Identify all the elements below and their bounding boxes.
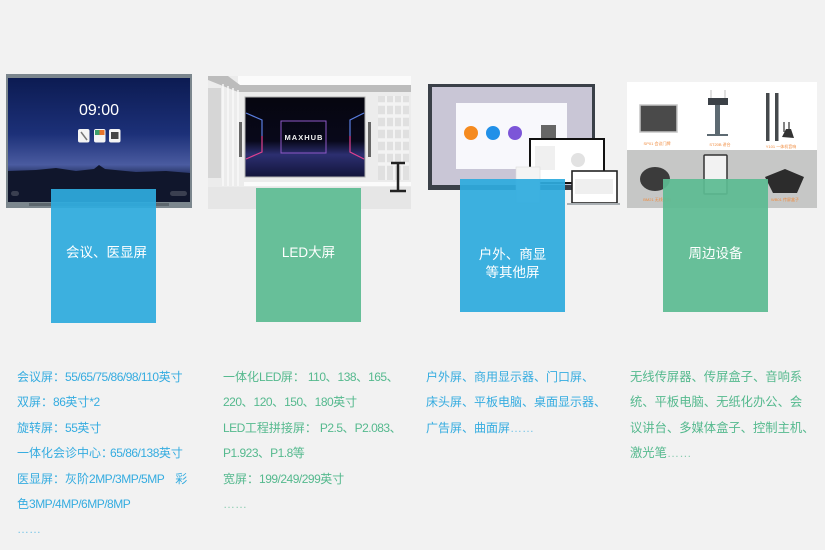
text: meeting display specs: ……: [17, 522, 41, 536]
text: meeting display specs: 医显屏：灰阶2MP/3MP/5MP 彩: [17, 472, 187, 486]
text: LED screen specs: ……: [223, 497, 247, 511]
image: peripheral devices: BM21 无线全向: [643, 196, 671, 202]
image: meeting screen: 09:00: [79, 102, 119, 119]
text: meeting display specs: 旋转屏：55英寸: [17, 421, 101, 435]
text: peripheral device list: 统、平板电脑、无纸化办公、会: [630, 395, 802, 409]
text: LED screen specs: 一体化LED屏：110、138、165、: [223, 370, 399, 384]
image: outdoor and commercial displays: [428, 84, 620, 205]
text: meeting display specs: [17, 370, 187, 536]
text: outdoor display list: 广告屏、曲面屏……: [426, 421, 534, 435]
text: LED screen specs: LED工程拼接屏：P2.5、P2.083、: [223, 421, 402, 435]
text: LED screen specs: [223, 370, 402, 511]
text: peripheral device list: [630, 370, 814, 460]
panel: outdoor and commercial displays: [460, 179, 565, 312]
image: LED screen room: MAXHUB: [285, 133, 323, 142]
image: LED screen room: [208, 76, 411, 209]
text: LED screen specs: P1.923、P1.8等: [223, 446, 305, 460]
text: outdoor display list: 床头屏、平板电脑、桌面显示器、: [426, 395, 606, 409]
text: meeting display specs: 会议屏：55/65/75/86/98/110英寸: [17, 370, 183, 384]
panel: outdoor and commercial displays: 户外、商显: [479, 247, 546, 262]
image: peripheral devices: WB01 传屏盒子: [771, 196, 799, 202]
panel: outdoor and commercial displays: 等其他屏: [486, 265, 540, 280]
image: peripheral devices: [627, 82, 817, 208]
image: peripheral devices: Y101 一体机音响: [766, 143, 796, 149]
image: peripheral devices: SP01 会议门牌: [644, 140, 670, 146]
text: LED screen specs: 220、120、150、180英寸: [223, 395, 357, 409]
text: LED screen specs: 宽屏：199/249/299英寸: [223, 472, 344, 486]
panel: LED large screens: LED大屏: [282, 245, 335, 260]
panel: peripheral devices: [663, 179, 768, 312]
text: outdoor display list: 户外屏、商用显示器、门口屏、: [426, 370, 594, 384]
panel: peripheral devices: 周边设备: [688, 246, 742, 261]
text: meeting display specs: 一体化会诊中心：65/86/138英寸: [17, 446, 183, 460]
panel: meeting and medical displays: 会议、医显屏: [66, 245, 147, 260]
image: meeting screen: [6, 74, 192, 208]
panel: meeting and medical displays: [51, 189, 156, 323]
image: peripheral devices: ST20B 讲台: [709, 141, 731, 147]
panel: LED large screens: [256, 188, 361, 322]
text: peripheral device list: 议讲台、多媒体盒子、控制主机、: [630, 421, 814, 435]
text: peripheral device list: 激光笔……: [630, 446, 692, 460]
text: outdoor display list: [426, 370, 606, 435]
text: meeting display specs: 双屏：86英寸*2: [17, 395, 100, 409]
text: peripheral device list: 无线传屏器、传屏盒子、音响系: [630, 370, 802, 384]
text: meeting display specs: 色3MP/4MP/6MP/8MP: [17, 497, 130, 511]
